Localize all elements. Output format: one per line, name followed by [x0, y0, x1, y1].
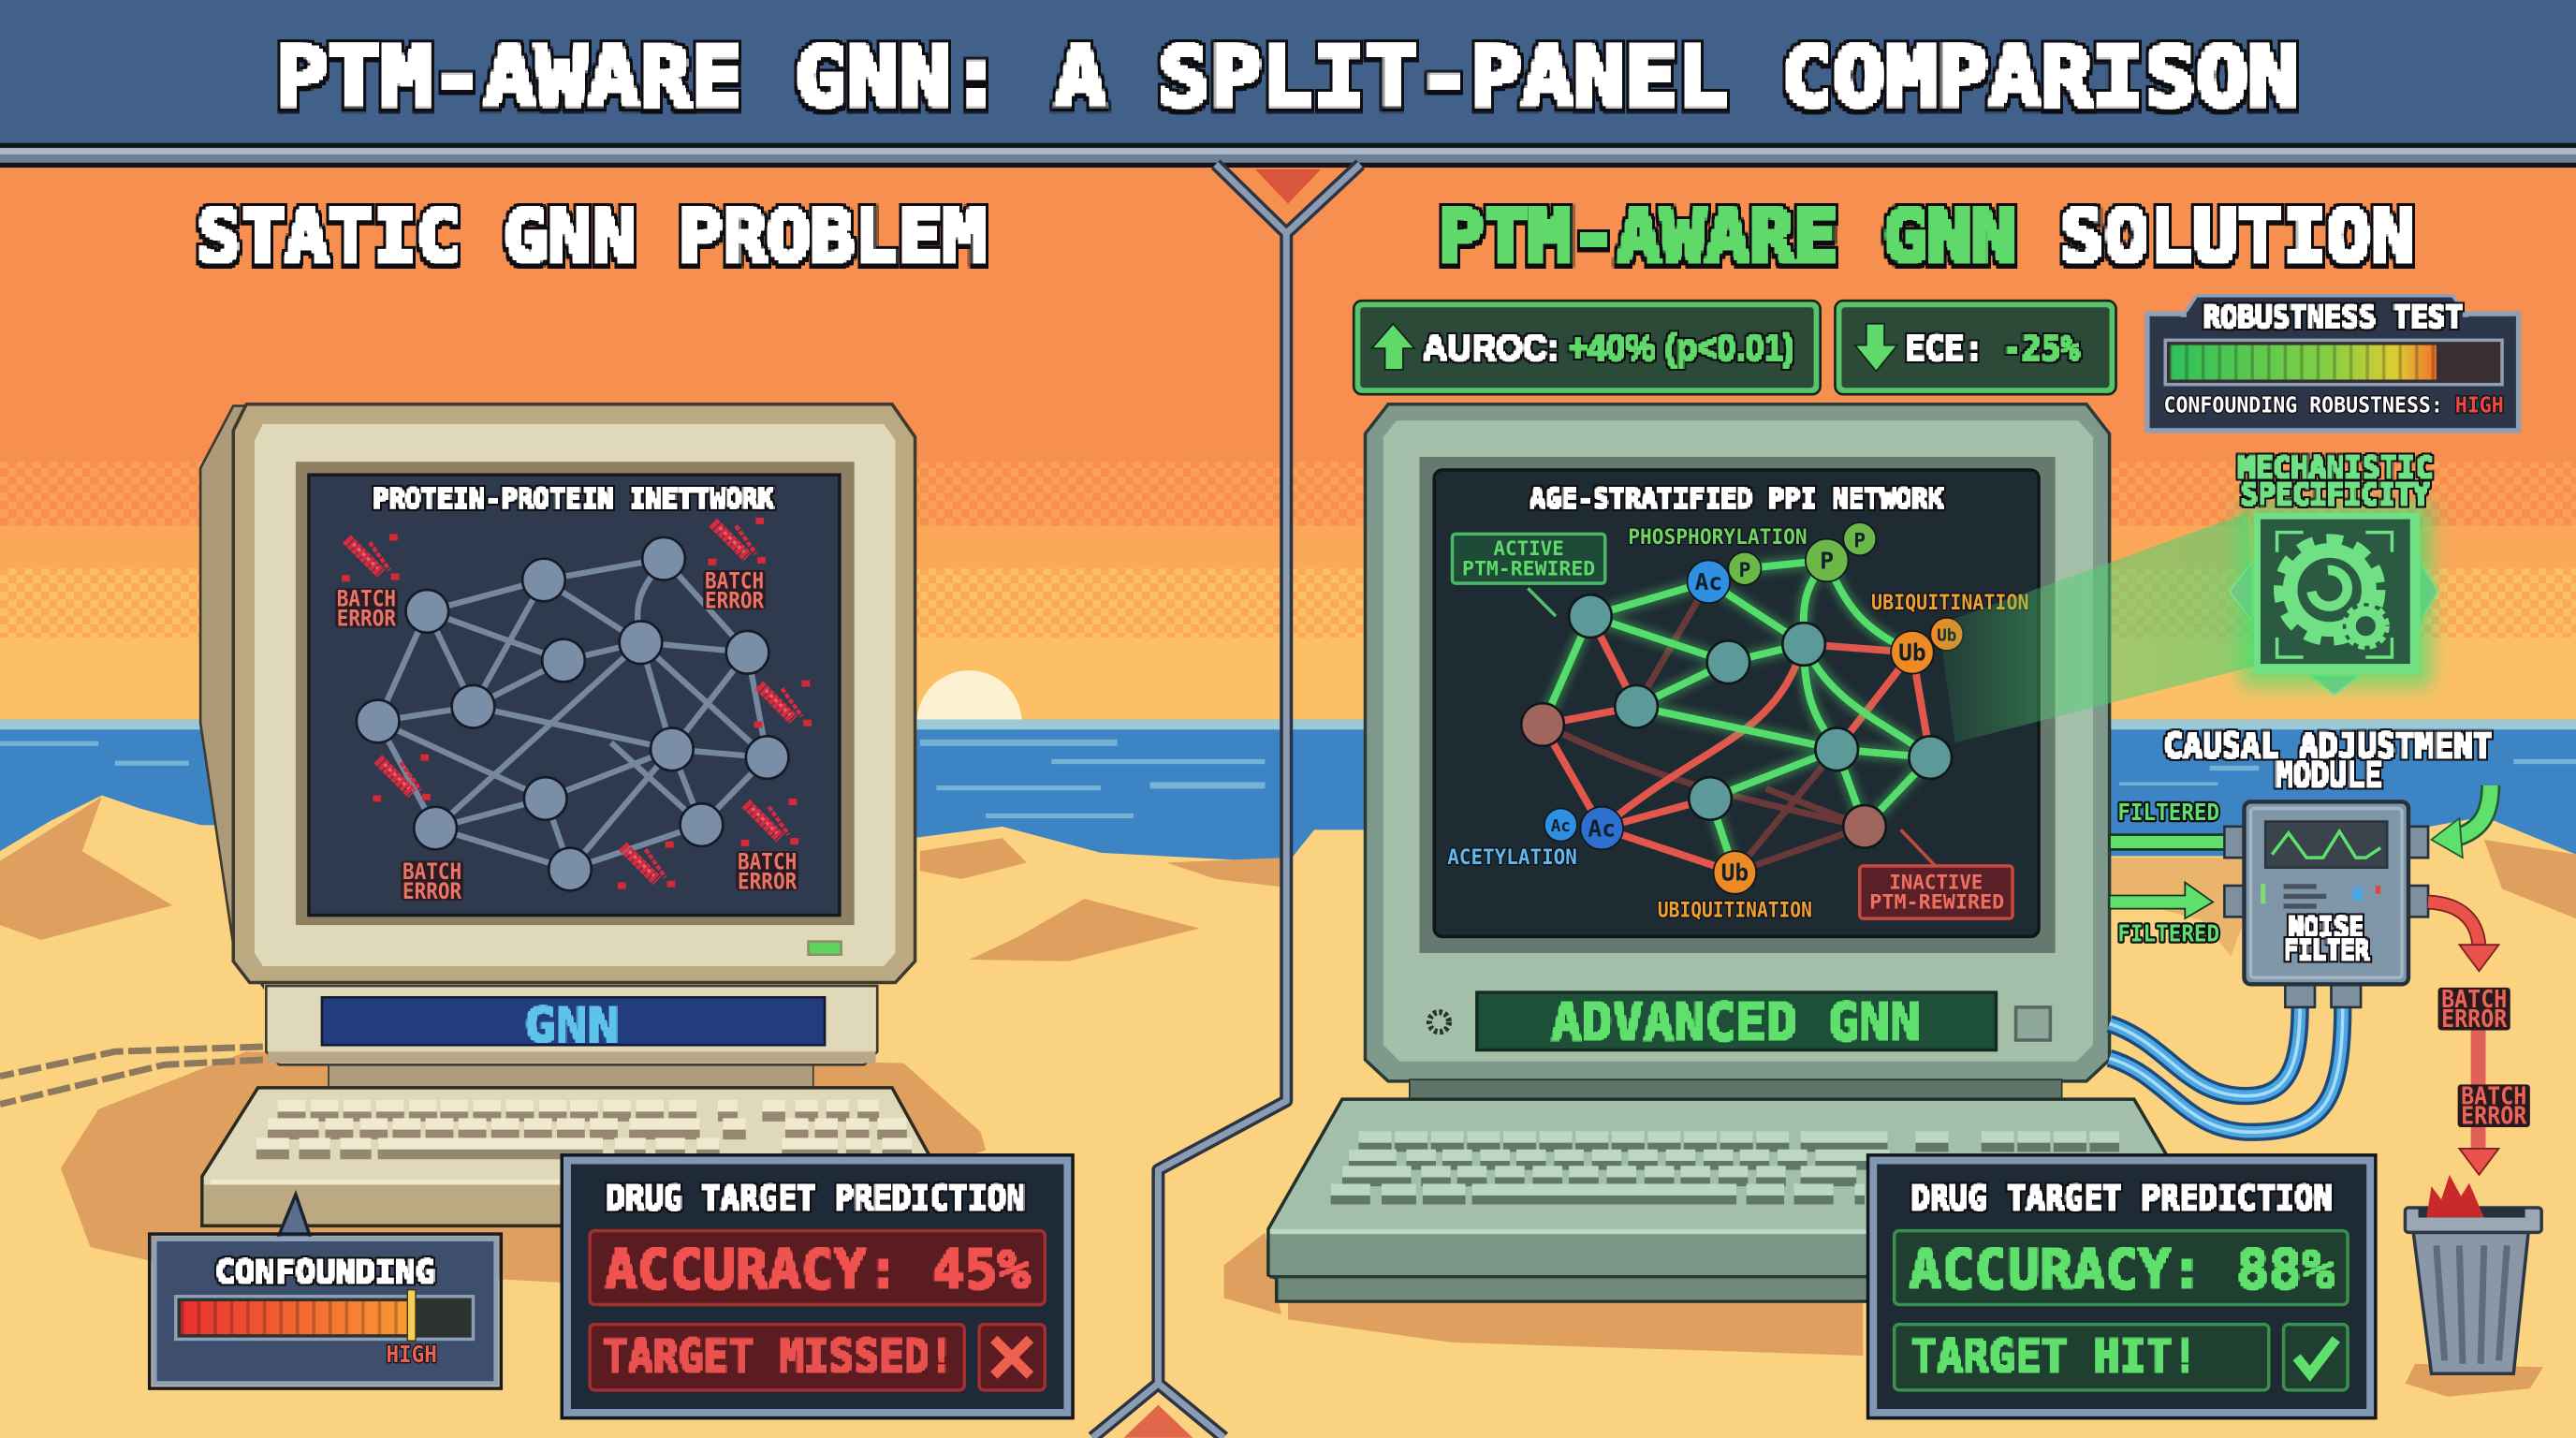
robustness test panel [2147, 296, 2519, 431]
batch error labels: BATCH [705, 567, 764, 594]
PTM nodes: P [1820, 547, 1834, 574]
green edges [1543, 560, 1930, 873]
causal adjustment module title: CAUSAL ADJUSTMENT [2163, 726, 2492, 766]
power LED [809, 942, 842, 955]
confounding robustness text: CONFOUNDING ROBUSTNESS: HIGH [2163, 394, 2504, 418]
accuracy readout: ACCURACY: 88% [1909, 1238, 2334, 1301]
batch error labels: BATCH [402, 858, 461, 885]
red edges [1543, 616, 1930, 873]
inactive PTM-rewired label: INACTIVE [1889, 871, 1983, 894]
inactive PTM-rewired label: PTM-REWIRED [1869, 890, 2004, 914]
phosphorylation label: PHOSPHORYLATION [1628, 526, 1808, 550]
acetylation label: ACETYLATION [1447, 846, 1577, 870]
ECE text: ECE: -25% [1906, 328, 2080, 368]
mechanistic specificity label [2237, 450, 2433, 512]
causal adjustment module title: MODULE [2276, 756, 2382, 796]
right monitor: green CRT [1365, 404, 2110, 1081]
batch error label two [2458, 1081, 2530, 1129]
confounding bar [176, 1290, 473, 1341]
mechanistic specificity label: SPECIFICITY [2241, 477, 2430, 512]
title: PTM-AWARE GNN: A SPLIT-PANEL COMPARISON [276, 29, 2300, 125]
PTM nodes [1544, 522, 1963, 894]
noise filter label: NOISE [2289, 911, 2364, 943]
PTM nodes: Ac [1695, 568, 1722, 595]
ubiquitination label top: UBIQUITINATION [1871, 592, 2029, 615]
panel title: DRUG TARGET PREDICTION [607, 1178, 1025, 1218]
monitor screen: PTM-aware network [1434, 470, 2039, 936]
inactive PTM-rewired label [1860, 829, 2012, 918]
PTM nodes: P [1739, 558, 1750, 581]
icon: up arrow [1372, 324, 1414, 370]
batch error label one: BATCH [2441, 985, 2507, 1013]
ubiquitination label bottom: UBIQUITINATION [1658, 899, 1812, 922]
PTM nodes: Ub [1721, 859, 1749, 887]
active PTM-rewired label: ACTIVE [1493, 536, 1564, 560]
drug target prediction panel: success [1868, 1155, 2376, 1418]
cable: left monitor trailing cables [0, 1047, 263, 1104]
icon: red X [979, 1325, 1045, 1390]
right keyboard [1268, 1079, 2169, 1301]
noise filter module [2224, 801, 2428, 1007]
batch error glitch marks [342, 518, 812, 889]
filtered label bottom: FILTERED [2117, 920, 2219, 947]
screen title: PROTEIN-PROTEIN INETTWORK [373, 483, 774, 514]
icon: green check [2284, 1325, 2348, 1390]
header banner [0, 0, 2576, 168]
PTM nodes: Ac [1588, 814, 1616, 842]
batch error label one [2438, 985, 2510, 1033]
active PTM-rewired label: PTM-REWIRED [1462, 556, 1595, 580]
center divider with arrows [1092, 165, 1360, 1438]
batch error label two: BATCH [2461, 1081, 2526, 1109]
curved green arrow into module [2432, 785, 2491, 858]
network nodes [357, 537, 788, 890]
batch error label two: ERROR [2461, 1101, 2527, 1129]
monitor screen: static PPI network [309, 475, 840, 916]
accuracy readout: ACCURACY: 45% [605, 1238, 1031, 1301]
PTM nodes: Ub [1898, 639, 1926, 667]
batch error labels: ERROR [402, 878, 462, 904]
power button [2016, 1007, 2050, 1040]
batch error labels: BATCH [337, 586, 396, 612]
PTM nodes: Ub [1937, 626, 1956, 645]
batch error labels: ERROR [705, 587, 765, 613]
left heading: STATIC GNN PROBLEM [198, 195, 986, 279]
network edges [378, 559, 768, 869]
mechanistic specificity label: MECHANISTIC [2237, 450, 2433, 486]
icon: mechanistic specificity gear badge [2230, 503, 2438, 695]
advanced GNN label: ADVANCED GNN [1551, 992, 1921, 1053]
target hit: TARGET HIT! [1910, 1329, 2198, 1384]
causal adjustment module title [2163, 726, 2492, 796]
AUROC text: AUROC: +40% (p<0.01) [1423, 328, 1794, 368]
PTM nodes: Ac [1551, 817, 1571, 836]
robustness title: ROBUSTNESS TEST [2203, 299, 2463, 334]
beam from network to mechanistic specificity icon [1939, 513, 2258, 742]
faded inactive edges [1543, 581, 1865, 873]
target hit [1895, 1325, 2269, 1390]
drug target prediction panel: failure [562, 1155, 1073, 1418]
icon: down arrow [1855, 324, 1897, 372]
left monitor base with GNN label [266, 986, 877, 1088]
metric pill: ECE [1835, 301, 2116, 394]
teal and rust nodes [1521, 594, 1952, 848]
batch error label one: ERROR [2441, 1005, 2508, 1033]
metric pill: AUROC [1354, 301, 1821, 394]
screen title: AGE-STRATIFIED PPI NETWORK [1530, 483, 1943, 514]
batch error labels: BATCH [738, 848, 797, 874]
filtered label top: FILTERED [2117, 799, 2219, 826]
noise filter label: FILTER [2284, 934, 2369, 966]
icon: trash can with discarded errors [2405, 1175, 2541, 1373]
red batch error arrows [2428, 902, 2530, 1175]
target missed: TARGET MISSED! [603, 1329, 955, 1384]
right heading: PTM-AWARE GNN SOLUTION [1439, 195, 2415, 279]
blue data cables [2110, 1005, 2343, 1132]
robustness bar [2165, 340, 2502, 385]
left monitor: beige CRT [200, 404, 915, 986]
confounding gauge panel [150, 1195, 501, 1388]
PTM nodes: P [1853, 528, 1866, 551]
batch error labels: ERROR [337, 606, 397, 632]
panel title: DRUG TARGET PREDICTION [1910, 1178, 2333, 1218]
icon: small chip [1429, 1012, 1449, 1032]
batch error labels [335, 567, 798, 904]
GNN label: GNN [524, 999, 620, 1054]
batch error labels: ERROR [738, 869, 798, 895]
HIGH label: HIGH [386, 1341, 437, 1368]
active PTM-rewired label [1453, 534, 1605, 616]
filtered green arrows [2110, 799, 2226, 947]
confounding label: CONFOUNDING [215, 1254, 435, 1292]
left keyboard [202, 1088, 944, 1225]
noise filter label [2284, 911, 2369, 966]
